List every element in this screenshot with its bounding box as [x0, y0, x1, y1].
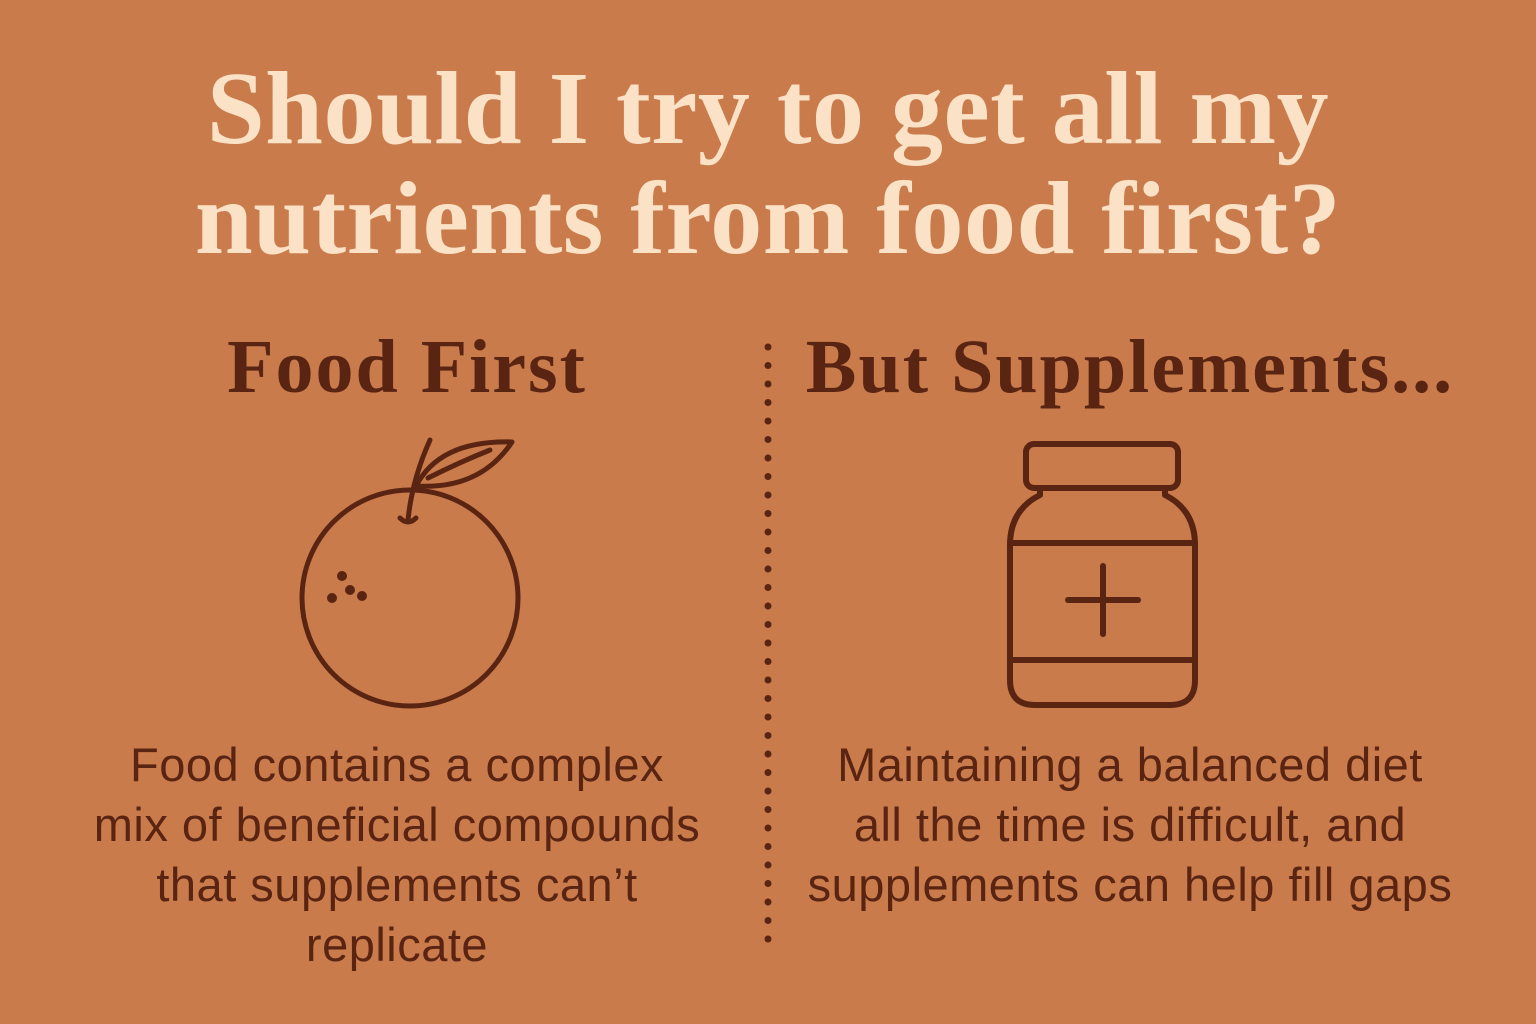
heading: food first: Food First — [227, 325, 587, 409]
icon: orange — [302, 440, 518, 706]
text: food first — [94, 738, 700, 971]
text: supplements: supplements can help fill gaps — [808, 858, 1452, 911]
divider: dotted line — [764, 347, 772, 945]
text: food first: mix of beneficial compounds — [94, 798, 700, 851]
text: supplements: all the time is difficult, and — [854, 798, 1406, 851]
text: food first: that supplements can’t — [156, 858, 638, 911]
title: nutrients from food first? — [195, 161, 1341, 276]
heading: but supplements: But Supplements... — [806, 325, 1454, 409]
text: supplements: Maintaining a balanced diet — [837, 738, 1423, 791]
icon: supplement jar — [1010, 444, 1195, 705]
title — [195, 51, 1341, 276]
title: Should I try to get all my — [207, 51, 1329, 166]
text: supplements — [808, 738, 1452, 911]
text: food first: replicate — [306, 918, 488, 971]
text: food first: Food contains a complex — [130, 738, 664, 791]
